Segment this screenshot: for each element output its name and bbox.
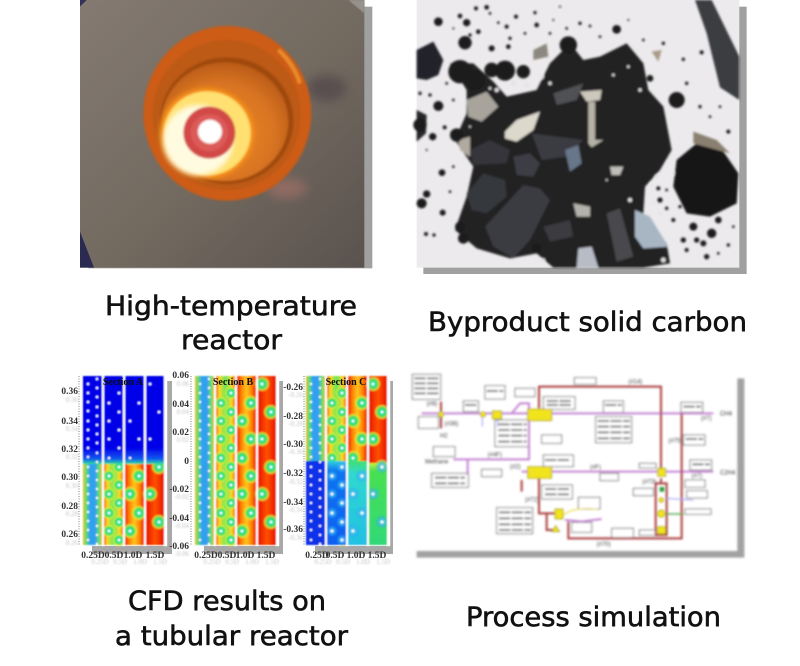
icon: glowing furnace opening bbox=[143, 26, 311, 201]
stream labels: (#2) bbox=[510, 464, 521, 470]
chart: Section A: Section A bbox=[103, 377, 144, 388]
stream labels: (#F) bbox=[590, 465, 601, 471]
chart: Section C: -0.36 bbox=[283, 525, 303, 535]
chart: Section C: 1.5D bbox=[368, 551, 386, 561]
stream labels: (#70) bbox=[597, 542, 611, 548]
chart: Section A: 0.30 bbox=[66, 482, 78, 490]
chart: Section B: 0.5D bbox=[218, 551, 236, 561]
chart: Section C: -0.26 bbox=[288, 391, 303, 399]
chart: Section A: 0.26 bbox=[61, 530, 78, 540]
chart: Section A: 0.34 bbox=[61, 417, 78, 427]
chart: Section C bbox=[283, 376, 393, 566]
chart: Section A bbox=[61, 376, 172, 566]
chart: Section A: 0.32 bbox=[61, 445, 78, 455]
chart: Section A: 0.5D bbox=[105, 551, 124, 561]
stream labels: (#73) bbox=[642, 479, 656, 485]
chart: Section A: 1.5D bbox=[153, 558, 167, 566]
chart: Section C: -0.26 bbox=[283, 383, 303, 393]
chart: Section B bbox=[169, 371, 283, 566]
chart: Section A: 0.25D bbox=[81, 551, 105, 561]
caption: high-temperature reactor: reactor bbox=[181, 325, 283, 356]
panel: high-temperature reactor photo bbox=[80, 0, 372, 268]
stream labels: (#4F) bbox=[488, 452, 502, 458]
stream labels: (#14) bbox=[628, 379, 642, 385]
stream labels: H2 bbox=[440, 434, 448, 440]
stream labels bbox=[425, 379, 736, 548]
blue, green and yellow lines bbox=[482, 417, 693, 500]
chart: Section A: 1.5D bbox=[146, 551, 164, 561]
chart: Section A: 1.0D bbox=[124, 551, 142, 561]
chart: Section C: -0.28 bbox=[283, 412, 303, 422]
chart: Section B: 0.25D bbox=[194, 551, 218, 561]
stream labels: (#75) bbox=[668, 438, 682, 444]
chart: Section B: 0.5D bbox=[225, 558, 239, 566]
chart: Section C: -0.34 bbox=[288, 506, 303, 514]
chart: Section B: 0.02 bbox=[177, 436, 190, 444]
chart: Section A: 1.0D bbox=[133, 558, 147, 566]
chart: Section A: 0.34 bbox=[66, 425, 78, 433]
chart: Section B: -0.02 bbox=[174, 493, 189, 501]
chart: Section A: 0.25D bbox=[91, 558, 109, 566]
stream labels: (#36) bbox=[444, 422, 458, 428]
stream labels: (#72) bbox=[525, 498, 539, 504]
chart: Section C: -0.30 bbox=[283, 440, 303, 450]
chart: Section B: 0.02 bbox=[172, 428, 189, 438]
stream labels: Methane bbox=[425, 460, 449, 466]
chart: Section A: 0.28 bbox=[66, 510, 78, 518]
light flecks in the carbon pile bbox=[469, 65, 675, 262]
chart: Section A: 0.5D bbox=[113, 558, 127, 566]
panel: byproduct solid carbon photo bbox=[413, 0, 747, 274]
stream labels: (#7) bbox=[692, 473, 702, 479]
chart: Section B: 0.25D bbox=[203, 558, 221, 566]
chart: Section C: 0.5D bbox=[326, 551, 344, 561]
chart: Section C: -0.30 bbox=[288, 448, 303, 456]
chart: Section B: -0.04 bbox=[174, 522, 189, 530]
chart: Section C: -0.36 bbox=[288, 534, 303, 542]
chart: Section C: 0.5D bbox=[336, 558, 350, 566]
carbon chunks and powder bbox=[413, 0, 739, 268]
stream labels: CH4 bbox=[720, 412, 733, 418]
chart: Section B: 1.0D bbox=[236, 551, 254, 561]
caption: CFD results: CFD results on bbox=[128, 586, 326, 617]
chart: Section B: -0.04 bbox=[169, 514, 189, 524]
red recycle streams bbox=[441, 387, 682, 538]
chart: Section B: 1.0D bbox=[245, 558, 259, 566]
stream boxes bbox=[412, 374, 712, 538]
chart: Section B: 0.06 bbox=[172, 371, 189, 381]
chart: Section C: Section C bbox=[326, 377, 366, 388]
chart: Section A: 0.36 bbox=[66, 396, 78, 404]
purple process streams bbox=[422, 403, 713, 522]
caption: byproduct solid carbon: Byproduct solid carbon bbox=[428, 307, 747, 338]
chart: Section C: -0.28 bbox=[288, 420, 303, 428]
chart: Section C: -0.32 bbox=[283, 469, 303, 479]
chart: Section B: 0.06 bbox=[177, 380, 190, 388]
chart: Section B: Section B bbox=[213, 377, 253, 388]
chart: Section C: 1.5D bbox=[376, 558, 390, 566]
caption: high-temperature reactor bbox=[105, 291, 357, 356]
chart: Section C: -0.32 bbox=[288, 478, 303, 486]
chart: Section C: 0.25D bbox=[305, 551, 329, 561]
caption: CFD results bbox=[115, 586, 349, 652]
chart: Section A: 0.36 bbox=[61, 387, 78, 397]
chart: Section B: -0.06 bbox=[174, 550, 189, 558]
caption: process simulation: Process simulation bbox=[466, 602, 721, 633]
chart: Section C: 1.0D bbox=[347, 551, 366, 561]
chart: Section A: 0.32 bbox=[66, 453, 78, 461]
chart: Section A: 0.30 bbox=[61, 473, 78, 483]
stream labels: (#8) bbox=[427, 402, 437, 408]
chart: Section B: 1.5D bbox=[257, 551, 276, 561]
chart: Section B: 0.04 bbox=[177, 408, 190, 416]
chart: Section C: 0.25D bbox=[314, 558, 332, 566]
chart: Section B: 1.5D bbox=[265, 558, 279, 566]
chart: Section B: 0 bbox=[184, 457, 189, 467]
stream labels: C2H4 bbox=[720, 470, 736, 476]
caption: CFD results: a tubular reactor bbox=[115, 621, 349, 652]
chart: Section A: 0.26 bbox=[66, 539, 78, 547]
yellow unit blocks bbox=[438, 409, 666, 534]
chart: Section B: 0.04 bbox=[172, 400, 189, 410]
chart: Section C: -0.34 bbox=[283, 498, 303, 508]
stream labels: (#7) bbox=[701, 416, 712, 422]
panel: process simulation flowsheet bbox=[412, 374, 744, 558]
chart: Section C: 1.0D bbox=[356, 558, 370, 566]
chart: Section A: 0.28 bbox=[61, 502, 78, 512]
panel: CFD results chart bbox=[61, 371, 393, 566]
chart: Section B: -0.06 bbox=[169, 542, 189, 552]
chart: Section B: -0.02 bbox=[169, 485, 189, 495]
caption: high-temperature reactor: High-temperature bbox=[105, 291, 357, 322]
